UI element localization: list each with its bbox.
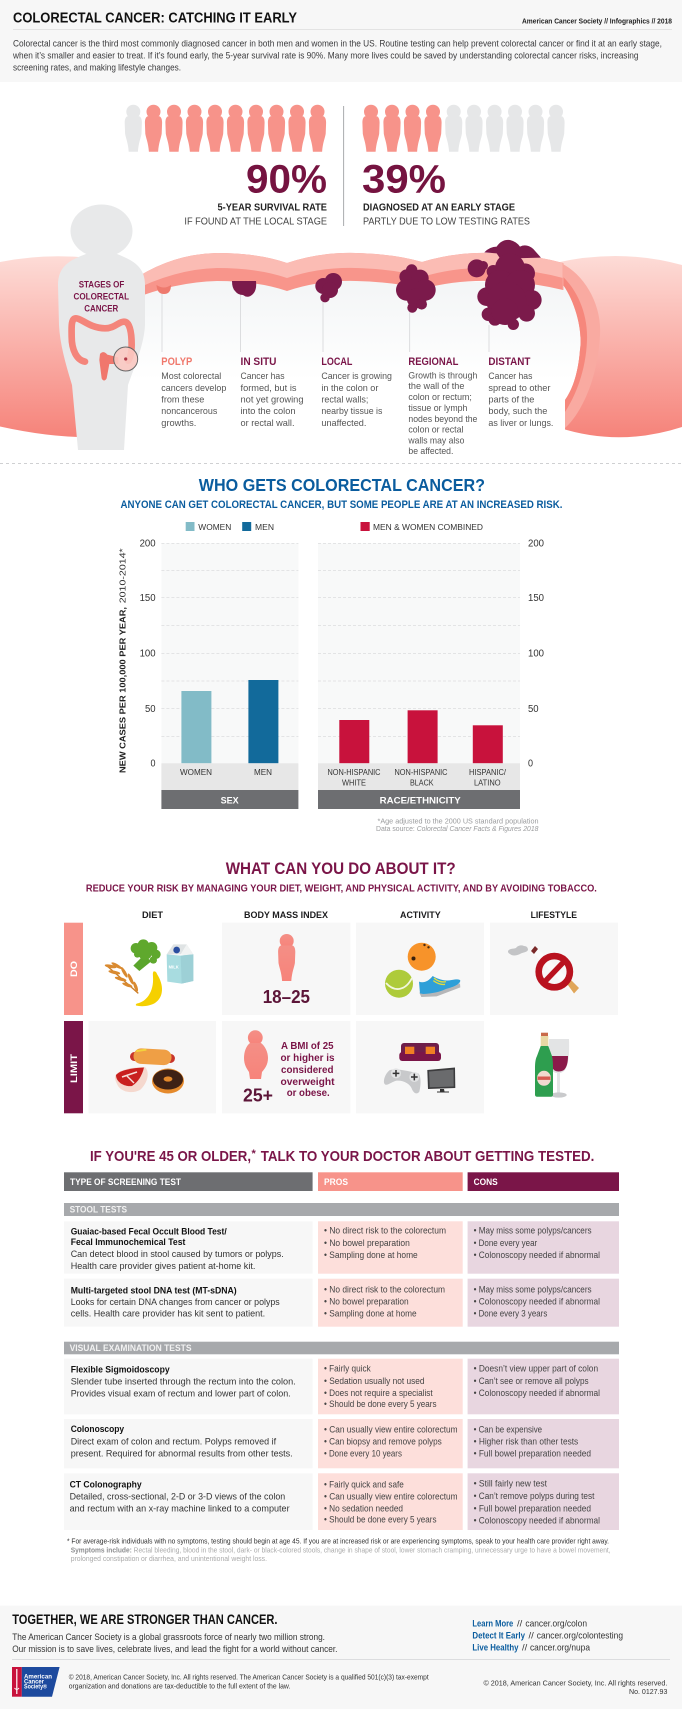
pros: • Can usually view entire colorectum	[324, 1491, 458, 1501]
stage: regional	[407, 356, 477, 456]
magnifier circle	[114, 347, 138, 371]
stage: local: rectal walls;	[321, 394, 368, 404]
panel label: RACE/ETHNICITY	[380, 796, 461, 807]
document number: © 2018, American Cancer Society, Inc. All rights reserved.	[484, 1679, 667, 1688]
pros: • No direct risk to the colorectum	[324, 1284, 445, 1294]
section bar: visual examination tests	[64, 1342, 619, 1354]
stage: polyp	[161, 356, 226, 428]
stat: 39 percent	[362, 158, 530, 228]
pros	[318, 1359, 463, 1414]
BMI note: or obese.	[287, 1088, 330, 1099]
body silhouette with colon	[58, 204, 145, 450]
category labels	[180, 767, 272, 777]
row: flexible sigmoidoscopy: Flexible Sigmoidoscopy	[71, 1363, 170, 1374]
copyright notice: © 2018, American Cancer Society, Inc. All rights reserved. The American Cancer Society is a qualified 501(c)(3) tax-exempt	[69, 1672, 429, 1681]
chart legend: MEN	[255, 522, 274, 532]
icon: sofa	[399, 1043, 441, 1061]
BMI note: considered	[281, 1065, 334, 1076]
cons	[468, 1279, 619, 1327]
panel: sex	[161, 543, 298, 809]
heading: what can you do about it: WHAT CAN YOU DO ABOUT IT?	[226, 859, 456, 878]
BMI value: 25+	[243, 1086, 273, 1106]
column headers: DIET	[142, 910, 163, 920]
category labels: BLACK	[410, 778, 434, 788]
icon: sedentary items	[384, 1043, 455, 1093]
icon: television	[427, 1068, 455, 1092]
pros: • Should be done every 5 years	[324, 1399, 437, 1409]
row: guaiac FOBT / FIT	[64, 1221, 619, 1274]
right y axis: 50	[528, 704, 539, 715]
y axis title	[118, 547, 128, 773]
stage: in situ: into the colon	[240, 405, 296, 416]
pros	[318, 1221, 463, 1274]
row: colonoscopy: present. Required for abnormal results from other tests.	[71, 1448, 293, 1459]
stage: regional: REGIONAL	[408, 356, 459, 368]
row: guaiac FOBT / FIT: Health care provider gives patient at-home kit.	[71, 1260, 255, 1271]
cons: • Still fairly new test	[474, 1479, 547, 1489]
category labels: WHITE	[342, 778, 366, 788]
heading: who gets colorectal cancer: ANYONE CAN GET COLORECTAL CANCER, BUT SOME PEOPLE ARE AT AN INCREASED RISK.	[120, 499, 562, 511]
cons: • Colonoscopy needed if abnormal	[474, 1296, 600, 1306]
cons: • Can be expensive	[474, 1424, 542, 1434]
row: flexible sigmoidoscopy: Provides visual exam of rectum and lower part of colon.	[71, 1387, 291, 1398]
table footnotes: * For average-risk individuals with no symptoms, testing should begin at age 45. If you are at increased risk or are experiencing symptoms, speak to your health care provider right away.	[67, 1536, 609, 1545]
category labels: HISPANIC/	[469, 767, 507, 777]
right y axis	[528, 539, 544, 770]
chart legend	[186, 522, 483, 532]
icon: banana	[136, 971, 162, 1006]
column headers: LIFESTYLE	[531, 910, 577, 920]
table footnotes: prolonged constipation or diarrhea, and unintentional weight loss.	[71, 1554, 267, 1563]
section bar: stool tests: STOOL TESTS	[70, 1205, 128, 1216]
bar chart	[118, 539, 544, 809]
logo: American Cancer Society: Society®	[24, 1684, 48, 1691]
stage: regional: walls may also	[407, 434, 464, 446]
mission text: Our mission is to save lives, celebrate lives, and lead the fight for a world without cancer.	[12, 1643, 337, 1654]
icon: healthy BMI person	[263, 934, 310, 1007]
row label: do: DO	[69, 960, 80, 977]
stage: distant: body, such the	[488, 405, 547, 416]
footer heading: TOGETHER, WE ARE STRONGER THAN CANCER.	[12, 1611, 277, 1627]
footer panel	[0, 1606, 682, 1709]
left y axis: 50	[145, 704, 156, 715]
stage: distant: parts of the	[488, 394, 534, 404]
cons: • Can’t see or remove all polyps	[474, 1376, 589, 1386]
stage: distant	[488, 356, 553, 428]
row label: limit: LIMIT	[69, 1054, 80, 1083]
BMI note: overweight	[280, 1077, 335, 1088]
stage: local: in the colon or	[321, 382, 378, 393]
row: guaiac FOBT / FIT: Guaiac-based Fecal Occult Blood Test/	[71, 1225, 227, 1236]
footer links: cancer.org/colon	[525, 1618, 587, 1629]
stage: polyp: noncancerous	[161, 405, 218, 416]
cons	[468, 1419, 619, 1468]
row: CT colonography	[64, 1473, 619, 1530]
category labels	[328, 767, 507, 788]
icon: healthy diet foods	[104, 939, 193, 1006]
row label: do	[64, 923, 83, 1015]
pros	[318, 1473, 463, 1530]
heading: talk to your doctor: *	[252, 1148, 256, 1160]
icon: donut	[152, 1068, 184, 1094]
cons: • Doesn’t view upper part of colon	[474, 1364, 598, 1374]
BMI note: A BMI of 25	[281, 1041, 334, 1052]
copyright notice: organization and donations are tax-deductible to the full extent of the law.	[69, 1682, 290, 1691]
polyp growth	[156, 285, 171, 294]
stage: in situ: IN SITU	[240, 356, 276, 368]
statistics: people pictograms	[125, 105, 565, 228]
pros: • Fairly quick	[324, 1364, 371, 1374]
pros: • No direct risk to the colorectum	[324, 1226, 446, 1236]
body heading	[74, 280, 129, 314]
panel label: SEX	[221, 796, 239, 807]
bar: men	[248, 680, 278, 763]
mission text: The American Cancer Society is a global grassroots force of nearly two million strong.	[12, 1631, 325, 1642]
logo: American Cancer Society: American	[24, 1674, 52, 1680]
icon: overweight person with BMI note	[243, 1030, 335, 1106]
stage: polyp: Most colorectal	[161, 370, 221, 381]
cons: • May miss some polyps/cancers	[474, 1284, 592, 1294]
heading: talk to your doctor	[90, 1148, 594, 1165]
footer links: Learn More	[472, 1618, 513, 1629]
cons: • Colonoscopy needed if abnormal	[474, 1250, 600, 1260]
footer links: //	[528, 1630, 534, 1641]
row: stool DNA test: cells. Health care provider has kit sent to patient.	[71, 1308, 265, 1319]
heading: talk to your doctor: IF YOU'RE 45 OR OLDER,	[90, 1148, 251, 1165]
footer links: cancer.org/colontesting	[537, 1630, 623, 1641]
row: guaiac FOBT / FIT: Fecal Immunochemical Test	[71, 1236, 185, 1247]
icon: activity equipment	[385, 943, 460, 998]
stage: polyp: from these	[161, 394, 204, 404]
pros: • No bowel preparation	[324, 1238, 410, 1248]
table footnotes: Symptoms include: Rectal bleeding, blood in the stool, dark- or black-colored stools, change in shape of stool, lower stomach cramping, unnecessary urge to have a bowel movement,	[71, 1545, 611, 1554]
footer links: Live Healthy	[472, 1642, 519, 1653]
pros: • Sampling done at home	[324, 1250, 418, 1260]
header: pros	[318, 1172, 463, 1191]
pictogram: 90 percent	[125, 105, 326, 152]
cons	[468, 1359, 619, 1414]
icon: beer bottle	[535, 1033, 553, 1097]
logo: American Cancer Society: Cancer	[24, 1680, 45, 1686]
stat: 90 percent: IF FOUND AT THE LOCAL STAGE	[184, 217, 327, 228]
stage: local: LOCAL	[321, 356, 353, 368]
heading: who gets colorectal cancer	[120, 475, 562, 511]
stage: polyp: cancers develop	[161, 382, 226, 393]
document number	[484, 1679, 667, 1696]
chart footnote: Data source: Colorectal Cancer Facts & Figures 2018	[376, 824, 539, 833]
row: colonoscopy: Colonoscopy	[71, 1423, 125, 1434]
icon: wine glass	[549, 1039, 569, 1098]
pros: • Can usually view entire colorectum	[324, 1424, 458, 1434]
stage: distant: spread to other	[488, 382, 550, 393]
footer links	[472, 1618, 623, 1653]
row: CT colonography: and rectum with an x-ray machine linked to a computer	[70, 1503, 290, 1514]
stage: in situ	[240, 356, 304, 428]
bar: non-hispanic black	[408, 710, 438, 763]
document number: No. 0127.93	[629, 1687, 667, 1696]
stage: local: unaffected.	[321, 417, 366, 428]
cell backgrounds	[88, 923, 618, 1113]
row: colonoscopy	[64, 1419, 619, 1468]
chart footnote	[376, 816, 539, 833]
body heading: COLORECTAL	[74, 292, 129, 302]
header panel	[0, 0, 682, 82]
in situ growth	[232, 281, 256, 297]
pros: • Fairly quick and safe	[324, 1479, 404, 1489]
body heading: STAGES OF	[79, 280, 125, 290]
right y axis: 0	[528, 759, 533, 770]
category labels: WOMEN	[180, 767, 212, 777]
logo: American Cancer Society	[12, 1667, 60, 1697]
stage: regional: nodes beyond the	[408, 413, 477, 424]
icon: no smoking	[508, 945, 579, 994]
colon diagram	[72, 318, 132, 380]
intro text	[12, 39, 662, 74]
body heading: CANCER	[84, 304, 119, 314]
stage: polyp: POLYP	[161, 356, 192, 368]
stage: polyp: growths.	[161, 417, 196, 428]
icon: tennis ball	[385, 970, 413, 998]
heading: what can you do about it	[86, 859, 597, 895]
header: cons	[468, 1172, 619, 1191]
heading: who gets colorectal cancer: WHO GETS COLORECTAL CANCER?	[199, 475, 485, 495]
chart legend: WOMEN	[198, 522, 231, 532]
left y axis: 100	[140, 649, 156, 660]
heading: what can you do about it: REDUCE YOUR RISK BY MANAGING YOUR DIET, WEIGHT, AND PHYSICAL ACTIVITY, AND BY AVOIDING TOBACCO.	[86, 884, 597, 895]
footer links: //	[517, 1618, 523, 1629]
section bar: stool tests	[64, 1203, 619, 1216]
category labels: NON-HISPANIC	[394, 767, 448, 777]
BMI note: or higher is	[280, 1053, 335, 1064]
stem lines	[162, 292, 489, 352]
stat: 39 percent: 39%	[362, 158, 446, 202]
stage: in situ: or rectal wall.	[240, 417, 294, 428]
mission text	[12, 1631, 337, 1654]
regional growth	[396, 264, 436, 313]
stage: local	[321, 356, 392, 428]
footer links: cancer.org/nupa	[530, 1642, 591, 1653]
right y axis: 200	[528, 539, 544, 550]
icon: hot dog	[130, 1048, 175, 1066]
icon: bowling ball	[408, 943, 436, 971]
icon: steak	[115, 1067, 148, 1092]
copyright notice	[69, 1672, 429, 1691]
left y axis: 200	[140, 539, 156, 550]
cons: • Colonoscopy needed if abnormal	[474, 1515, 600, 1525]
row: stool DNA test: Looks for certain DNA changes from cancer or polyps	[71, 1296, 280, 1307]
pros: • Done every 10 years	[324, 1448, 402, 1458]
intro text: screening rates, and making lifestyle changes.	[13, 63, 181, 74]
pictogram: 39 percent	[362, 105, 565, 152]
pros	[318, 1279, 463, 1327]
row: colonoscopy: Direct exam of colon and rectum. Polyps removed if	[71, 1435, 276, 1446]
right y axis: 100	[528, 649, 544, 660]
cons: • Done every year	[474, 1238, 537, 1248]
category labels: NON-HISPANIC	[328, 767, 380, 777]
icon: wheat	[104, 961, 139, 993]
cons: • Full bowel preparation needed	[474, 1448, 591, 1458]
cons	[468, 1221, 619, 1274]
chart legend: MEN & WOMEN COMBINED	[373, 522, 483, 532]
footer links: //	[522, 1642, 528, 1653]
stage: regional: be affected.	[408, 445, 453, 456]
stat: 90 percent: 90%	[246, 158, 327, 202]
stage: regional: colon or rectal	[408, 424, 463, 434]
stat: 39 percent: PARTLY DUE TO LOW TESTING RATES	[363, 217, 530, 228]
stage: distant: as liver or lungs.	[488, 417, 553, 428]
heading: talk to your doctor: TALK TO YOUR DOCTOR ABOUT GETTING TESTED.	[261, 1148, 594, 1165]
table header	[64, 1172, 619, 1191]
chart footnote: *Age adjusted to the 2000 US standard population	[378, 816, 538, 825]
footer links: Detect It Early	[472, 1630, 526, 1641]
bar: non-hispanic white	[339, 720, 369, 763]
stage: regional: colon or rectum;	[408, 391, 472, 402]
stage: in situ: Cancer has	[240, 370, 285, 381]
icon: game controller	[384, 1068, 421, 1093]
cons: • Can’t remove polyps during test	[474, 1491, 595, 1501]
row: stool DNA test	[64, 1279, 619, 1327]
stat: 90 percent: 5-YEAR SURVIVAL RATE	[218, 203, 327, 214]
cons: • May miss some polyps/cancers	[474, 1226, 592, 1236]
category labels: MEN	[254, 767, 272, 777]
pros: • Sampling done at home	[324, 1309, 417, 1319]
stat: 90 percent	[184, 158, 327, 228]
pros: • No bowel preparation	[324, 1296, 409, 1306]
table footnotes	[67, 1536, 611, 1563]
stage: in situ: not yet growing	[240, 394, 304, 404]
stage: local: nearby tissue is	[321, 405, 383, 416]
colon illustration	[0, 253, 682, 462]
pros: • Can biopsy and remove polyps	[324, 1436, 442, 1446]
y axis title: 2010-2014*	[118, 547, 128, 603]
left y axis: 0	[150, 759, 156, 770]
cons: • Full bowel preparation needed	[474, 1503, 591, 1513]
right y axis: 150	[528, 593, 544, 604]
BMI note	[280, 1041, 335, 1099]
bar: women	[181, 691, 211, 763]
icon: broccoli	[131, 939, 161, 971]
pros: • No sedation needed	[324, 1503, 403, 1513]
column headers: ACTIVITY	[400, 910, 441, 920]
icon: alcohol	[535, 1033, 569, 1098]
icon: sneaker	[419, 976, 460, 997]
row: flexible sigmoidoscopy	[64, 1359, 619, 1414]
icon: unhealthy foods	[115, 1048, 184, 1094]
bar: hispanic latino	[473, 725, 503, 763]
pros: • Does not require a specialist	[324, 1388, 433, 1398]
stage: local: Cancer is growing	[321, 370, 392, 381]
cons	[468, 1473, 619, 1530]
table header: TYPE OF SCREENING TEST	[70, 1177, 181, 1188]
cons: • Higher risk than other tests	[474, 1436, 579, 1446]
row: CT colonography: Detailed, cross-sectional, 2-D or 3-D views of the colon	[70, 1490, 285, 1501]
stage: distant: Cancer has	[488, 370, 533, 381]
pros	[318, 1419, 463, 1468]
header: cons: CONS	[474, 1177, 498, 1188]
stage: regional: Growth is through	[408, 370, 477, 380]
row: flexible sigmoidoscopy: Slender tube inserted through the rectum into the colon.	[71, 1375, 296, 1386]
header: pros: PROS	[324, 1177, 349, 1188]
column headers	[142, 910, 577, 920]
row label: limit	[64, 1021, 83, 1113]
row: stool DNA test: Multi-targeted stool DNA test (MT-sDNA)	[71, 1284, 237, 1295]
section bar: visual examination tests: VISUAL EXAMINATION TESTS	[70, 1343, 192, 1354]
column headers: BODY MASS INDEX	[244, 910, 329, 920]
pros: • Should be done every 5 years	[324, 1515, 437, 1525]
stage: in situ: formed, but is	[240, 382, 297, 393]
left y axis: 150	[140, 593, 156, 604]
cons: • Done every 3 years	[474, 1309, 548, 1319]
stage: distant: DISTANT	[488, 356, 531, 368]
cons: • Colonoscopy needed if abnormal	[474, 1388, 600, 1398]
pros: • Sedation usually not used	[324, 1376, 424, 1386]
category labels: LATINO	[474, 778, 501, 788]
distant growth	[468, 240, 542, 330]
title: COLORECTAL CANCER: CATCHING IT EARLY	[13, 11, 297, 27]
panel: race and ethnicity	[318, 543, 520, 809]
y axis title: NEW CASES PER 100,000 PER YEAR,	[118, 607, 128, 773]
left y axis	[140, 539, 156, 770]
BMI range: 18–25	[263, 987, 310, 1007]
stage: regional: tissue or lymph	[408, 402, 467, 413]
local growth	[315, 273, 342, 302]
stat: 39 percent: DIAGNOSED AT AN EARLY STAGE	[363, 203, 515, 214]
row: CT colonography: CT Colonography	[70, 1478, 142, 1489]
icon: milk carton: MILK	[169, 965, 179, 970]
row: guaiac FOBT / FIT: Can detect blood in stool caused by tumors or polyps.	[71, 1248, 284, 1259]
stage: regional: the wall of the	[408, 380, 464, 391]
